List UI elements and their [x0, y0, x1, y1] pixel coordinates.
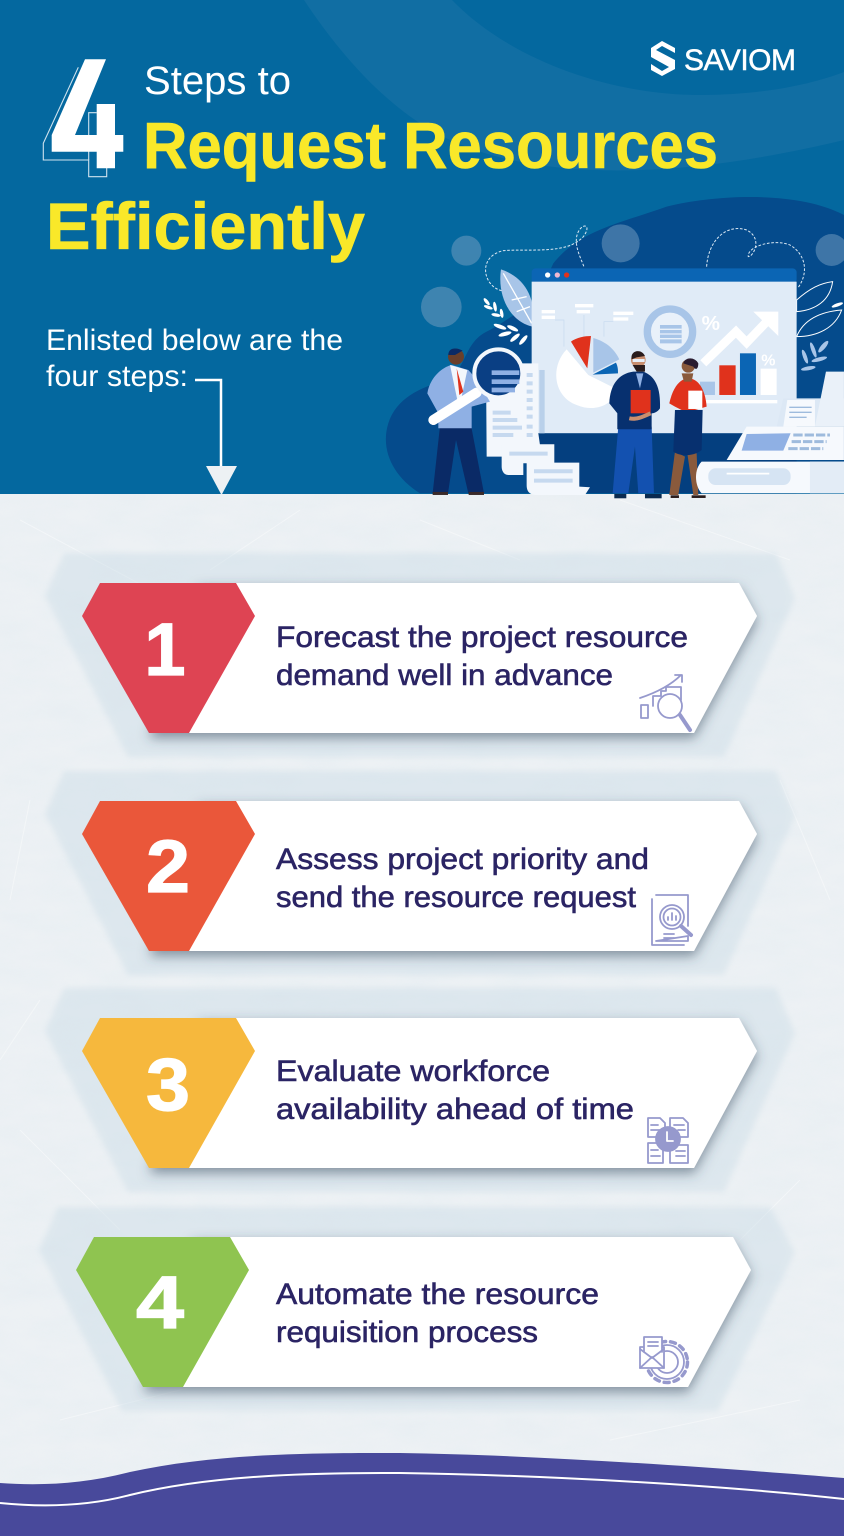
number badge [76, 1237, 249, 1387]
icon: envelope with gear [640, 1337, 688, 1382]
pie chart [556, 336, 619, 408]
icon: chart with magnifier [640, 675, 690, 730]
step text: demand well in advance [276, 659, 613, 692]
title line: request resources: Request Resources [143, 108, 718, 182]
step text [276, 621, 688, 692]
halo [39, 1207, 795, 1411]
step 1 [45, 553, 795, 757]
footer wave [0, 1453, 844, 1536]
step 4 [39, 1207, 795, 1411]
step text [276, 843, 649, 914]
leaves [483, 269, 843, 372]
step text: send the resource request [276, 881, 637, 914]
invoice paper [486, 363, 590, 495]
halo [45, 988, 795, 1192]
step text: availability ahead of time [276, 1093, 634, 1126]
intro text [46, 324, 343, 393]
floating circles [421, 224, 844, 327]
step text: requisition process [276, 1316, 538, 1349]
card [143, 1237, 751, 1387]
step text: Assess project priority and [276, 843, 649, 876]
background: icy texture [0, 494, 844, 1536]
growth arrow and bars [700, 312, 778, 403]
number badge [82, 583, 255, 733]
number: 3 [146, 1043, 190, 1126]
card [149, 1018, 757, 1168]
number badge [82, 801, 255, 951]
dashed loops [486, 226, 804, 291]
step text: Forecast the project resource [276, 621, 688, 654]
card [149, 801, 757, 951]
title line: steps to: Steps to [144, 59, 291, 103]
number: 2 [146, 825, 190, 908]
number badge [82, 1018, 255, 1168]
blue sprig [801, 340, 830, 372]
step 3 [45, 988, 795, 1192]
number: 1 [144, 608, 186, 691]
dashboard window [532, 268, 797, 493]
title line: efficiently: Efficiently [46, 189, 365, 263]
step text: Evaluate workforce [276, 1055, 550, 1088]
growth arrow and bars: % [761, 353, 776, 370]
header dark blobs [386, 197, 844, 493]
halo [45, 771, 795, 975]
halo [45, 553, 795, 757]
card [149, 583, 757, 733]
coin circle [647, 309, 693, 354]
step text [276, 1278, 599, 1349]
icon: documents with clock [648, 1118, 688, 1163]
illustration: team reviewing dashboard [421, 224, 844, 498]
header panel [0, 0, 844, 494]
icon: report with magnifier [652, 895, 691, 945]
step text: Automate the resource [276, 1278, 599, 1311]
man with magnifier [427, 349, 522, 495]
title [43, 59, 718, 263]
white sprigs [483, 297, 843, 346]
man in centre [609, 351, 662, 498]
arrow [195, 380, 237, 495]
woman in centre [669, 358, 707, 498]
step text [276, 1055, 634, 1126]
intro text: Enlisted below are the [46, 324, 343, 357]
number: 4 [136, 1261, 184, 1344]
logo: Saviom: SAVIOM [684, 44, 797, 77]
printer and calculator [696, 372, 844, 493]
intro text: four steps: [46, 360, 188, 393]
big numeral 4 [43, 59, 123, 177]
step 2 [45, 771, 795, 975]
growth arrow and bars: % [702, 312, 720, 335]
